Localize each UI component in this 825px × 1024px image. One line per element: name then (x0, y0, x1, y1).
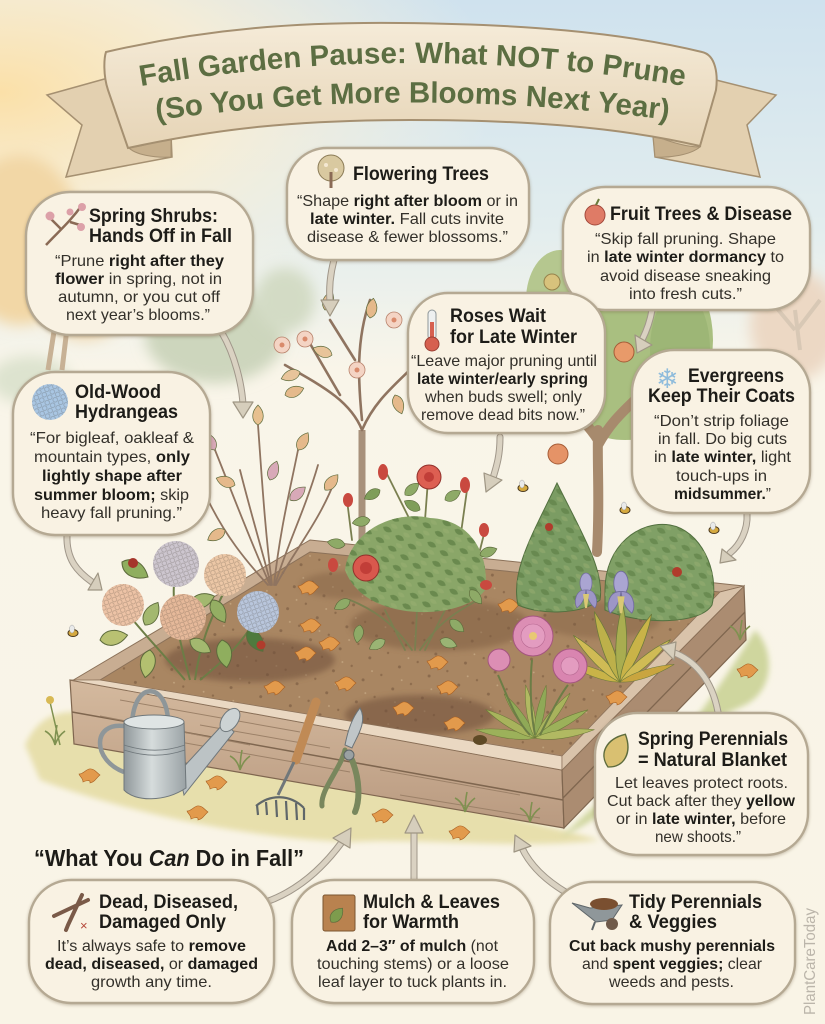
background trees (0, 155, 825, 404)
arrow: spring shrubs (222, 333, 253, 418)
heading (99, 892, 238, 933)
heading: & Veggies (629, 912, 717, 933)
body text: “Prune right after they (55, 253, 224, 270)
body text: flower in spring, not in (55, 271, 222, 288)
body text (45, 938, 258, 991)
body text (30, 430, 194, 522)
body text: “Skip fall pruning. Shape (595, 231, 776, 248)
body text (587, 231, 784, 303)
heading: Tidy Perennials (629, 892, 762, 913)
icon: snowflake: ❄ (656, 364, 679, 394)
heading: Dead, Diseased, (99, 892, 238, 913)
panel: roses (408, 293, 605, 433)
body text: leaf layer to tuck plants in. (318, 974, 507, 991)
banner left tail (47, 78, 172, 177)
body text: late winter. Fall cuts invite (310, 211, 504, 228)
body text (607, 775, 796, 846)
body text: heavy fall pruning.” (41, 505, 182, 522)
bed front board (70, 680, 564, 828)
heading: Spring Perennials (638, 729, 788, 750)
body text: growth any time. (91, 974, 212, 991)
bare spring shrub (200, 405, 342, 585)
hydrangea plant (99, 541, 279, 680)
watering can (100, 691, 244, 799)
body text: in late winter dormancy to (587, 249, 784, 266)
body text: late winter/early spring (417, 371, 588, 388)
heading: Old-Wood (75, 382, 161, 403)
raised garden bed (70, 540, 746, 828)
heading: Spring Shrubs: (89, 206, 218, 227)
arrow: flowering trees (321, 260, 339, 316)
evergreen shrubs (516, 483, 714, 621)
iris and yellow foliage (562, 571, 675, 686)
bed back boards (70, 540, 744, 682)
ground wash (25, 630, 769, 844)
banner right tail (653, 80, 776, 177)
icon: wheelbarrow (572, 898, 622, 930)
body text: in fall. Do big cuts (658, 431, 787, 448)
body text: next year’s blooms.” (66, 307, 210, 324)
arrow: spring perennials (660, 642, 718, 712)
heading (648, 366, 795, 407)
heading: Hands Off in Fall (89, 226, 232, 247)
icon: hydrangea (32, 384, 68, 420)
heading: = Natural Blanket (638, 750, 788, 771)
body text (297, 193, 518, 246)
arrow: dead wood (266, 828, 351, 902)
pruners (322, 708, 363, 812)
body text: It’s always safe to remove (57, 938, 246, 955)
hand rake (256, 702, 316, 820)
body text: in late winter, light (654, 449, 792, 466)
body text (411, 353, 597, 424)
peonies (475, 616, 595, 742)
icon: mulch bag (323, 895, 355, 931)
arrow: mulch (405, 815, 423, 880)
heading (629, 892, 762, 933)
section heading: what you can do: “What You Can Do in Fall” (34, 845, 304, 871)
heading: Hydrangeas (75, 402, 178, 423)
heading: Evergreens (688, 366, 784, 387)
body text: weeds and pests. (608, 974, 734, 991)
heading (363, 892, 500, 933)
body text: new shoots.” (655, 829, 741, 846)
body text: and spent veggies; clear (582, 956, 763, 973)
body text: Let leaves protect roots. (615, 775, 788, 792)
flowering tree (274, 289, 420, 560)
bed soil (70, 540, 744, 770)
body text: Cut back mushy perennials (569, 938, 775, 955)
body text (569, 938, 775, 991)
banner body (104, 23, 717, 148)
heading: Flowering Trees (353, 164, 489, 185)
body text: Add 2–3″ of mulch (not (326, 938, 499, 955)
title banner (46, 22, 778, 178)
title text: (So You Get More Blooms Next Year) (156, 81, 668, 126)
title text (139, 42, 685, 126)
panel: spring shrubs (26, 192, 253, 335)
body text: remove dead bits now.” (421, 407, 585, 424)
body text: autumn, or you cut off (58, 289, 221, 306)
panel: mulch and leaves (292, 880, 534, 1003)
arrow: old-wood hydrangeas (67, 535, 102, 590)
panel: old-wood hydrangeas (13, 372, 210, 535)
arrow: evergreens (720, 514, 747, 563)
heading: Mulch & Leaves (363, 892, 500, 913)
grass and dandelion tufts (45, 620, 750, 822)
body text: summer bloom; skip (34, 487, 189, 504)
panel: spring perennials (595, 713, 808, 855)
body text: dead, diseased, or damaged (45, 956, 258, 973)
body text (317, 938, 509, 991)
icon: cherry branch (46, 203, 86, 245)
body text: when buds swell; only (424, 389, 582, 406)
panel: flowering trees (287, 148, 529, 260)
panel: dead, diseased, damaged (29, 880, 274, 1003)
heading (638, 729, 788, 771)
body text: or in late winter, before (616, 811, 786, 828)
body text: Cut back after they yellow (607, 793, 796, 810)
fallen leaves (79, 581, 758, 840)
panel: evergreens (632, 350, 810, 513)
title text: Fall Garden Pause: What NOT to Prune (139, 42, 685, 86)
heading: Keep Their Coats (648, 386, 795, 407)
rose bush (326, 464, 499, 653)
icon: thermometer (425, 310, 439, 351)
body text: “Leave major pruning until (411, 353, 597, 370)
icon: pruners with x: × (80, 918, 88, 933)
body text: “Don’t strip foliage (654, 413, 789, 430)
body text: disease & fewer blossoms.” (307, 229, 508, 246)
arrow: roses (484, 437, 502, 492)
body text: touch-ups in (676, 468, 767, 485)
icon: leaf (598, 729, 635, 772)
body text: mountain types, only (34, 449, 190, 466)
heading: for Late Winter (450, 327, 578, 348)
watermark: PlantCareToday (802, 908, 819, 1015)
beetle and bees (68, 480, 719, 745)
body text (654, 413, 792, 503)
arrow: tidy perennials (514, 835, 567, 893)
body text: “Shape right after bloom or in (297, 193, 518, 210)
body text: into fresh cuts.” (629, 286, 742, 303)
heading: Damaged Only (99, 912, 226, 933)
body text: lightly shape after (42, 468, 182, 485)
heading: Fruit Trees & Disease (610, 204, 792, 225)
bed right board (562, 586, 746, 828)
icon: pruners with x (54, 895, 88, 933)
heading (450, 306, 578, 348)
body text: avoid disease sneaking (600, 268, 771, 285)
body text (55, 253, 224, 324)
heading (89, 206, 232, 247)
heading (75, 382, 178, 423)
panel: tidy perennials (550, 882, 795, 1004)
fruit tree (526, 240, 713, 552)
heading: for Warmth (363, 912, 459, 933)
body text: midsummer.” (674, 486, 771, 503)
icon: tree (318, 155, 344, 188)
panel: fruit trees (563, 187, 810, 310)
icon: apple (585, 199, 605, 225)
body text: “For bigleaf, oakleaf & (30, 430, 194, 447)
arrow: fruit trees (635, 310, 652, 353)
heading: Roses Wait (450, 306, 547, 327)
body text: touching stems) or a loose (317, 956, 509, 973)
